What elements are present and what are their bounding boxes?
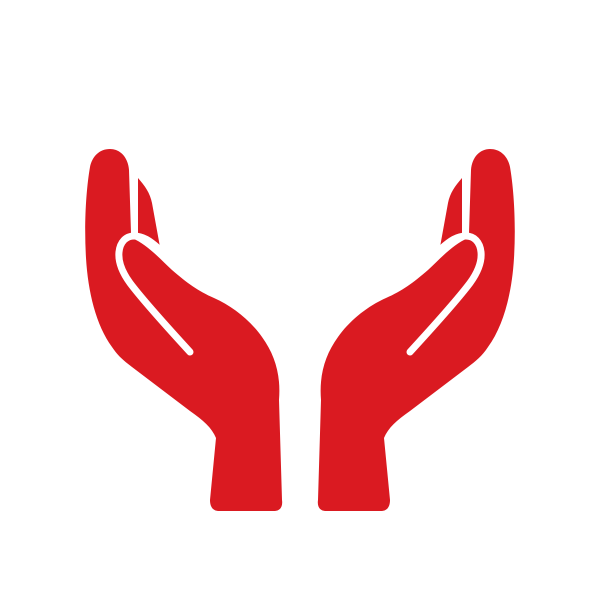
icon: right hand <box>318 149 515 511</box>
icon: left hand <box>85 149 282 511</box>
